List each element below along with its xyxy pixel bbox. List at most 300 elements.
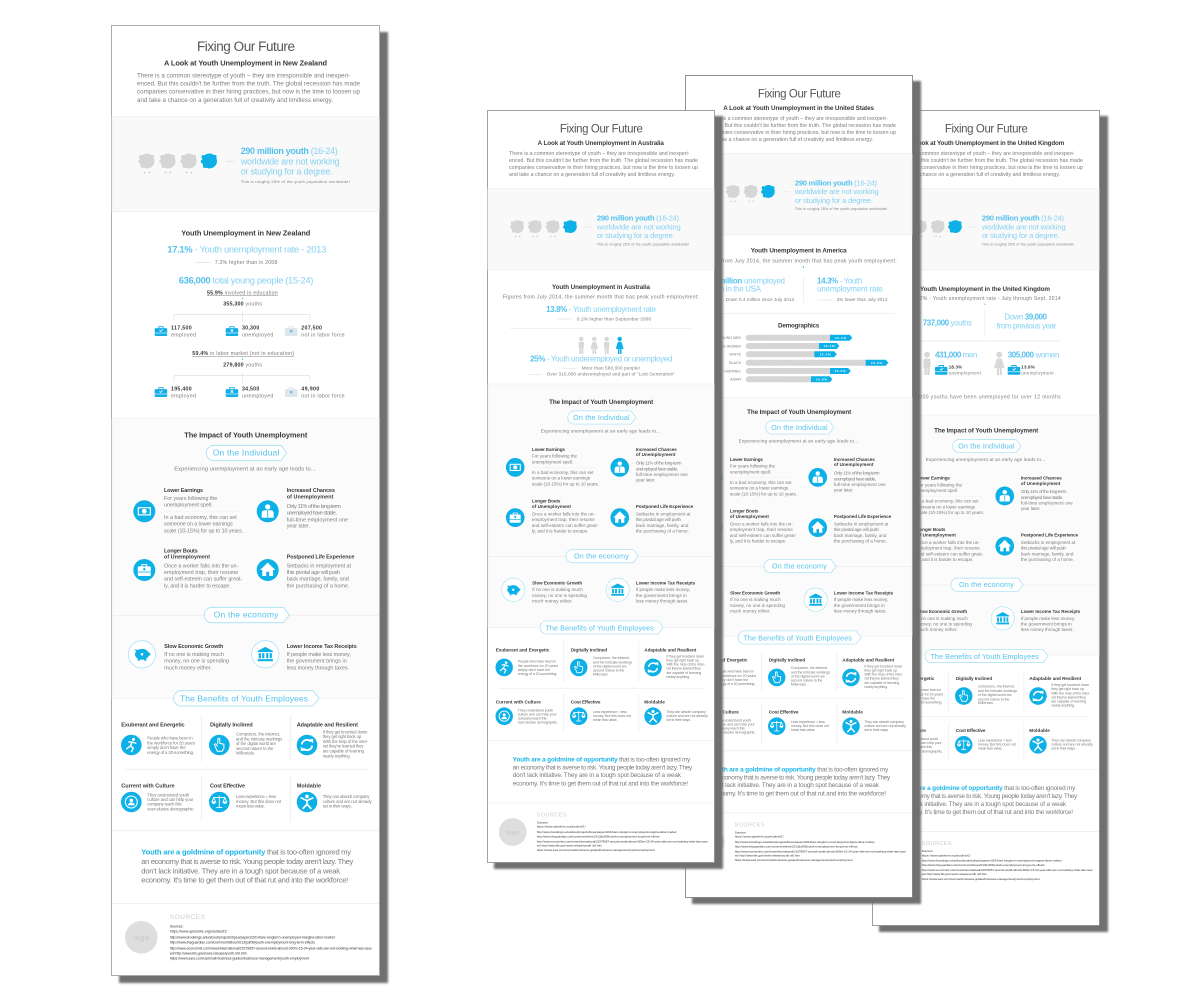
panel: global statistic [488,189,714,270]
benefit: moldable [842,710,906,735]
labor market breakdown: 279,800 youths [223,362,262,368]
panel: Australia statistics: 6.2% higher than September 2008 [577,316,651,321]
item: lower tax receipts [804,588,894,614]
benefit: current with culture: company reach this [903,745,932,749]
benefit: adaptable [644,647,706,679]
item: longer bouts: and self-esteem can suffer great- [164,577,243,583]
item: longer bouts: Once a worker falls into the un- [532,511,595,516]
item: slow growth: money, no one is spending [164,659,229,665]
item: longer bouts [133,548,243,589]
benefit: moldable: They can absorb company [864,720,904,724]
benefit: adaptable: net they've learned they [323,744,364,749]
benefit: cost effective: money. But this does not [236,799,282,804]
benefit: adaptable: If they get knocked down [1051,683,1089,687]
women statistic: unemployment [1021,370,1054,375]
benefit: moldable: They can absorb company [323,794,370,799]
benefit: exuberant: energy of a 20-something. [903,701,942,705]
item: postponed life experience: Postponed Life Experience [636,504,694,509]
benefit: digitally inclined: Computers, the internet, [236,731,280,736]
item: postponed life experience: Setbacks in employment at [636,511,691,516]
sources: Sources: [735,830,746,834]
tag: on the economy: On the economy [214,610,279,620]
item: postponed life experience: back marriage, family, and [287,577,349,583]
tag: on the economy: On the economy [574,551,629,560]
tag: on the economy [951,578,1023,591]
sources: SOURCES [922,841,952,847]
benefit: moldable: culture and are not already [323,799,373,804]
item: longer bouts: and self-esteem can suffer great- [532,523,599,528]
item: increased chances: of Unemployment [636,452,676,457]
benefit: digitally inclined: and the intricate workings [978,689,1017,693]
sources: ed/ http://www.bls.gov/news.release/youth.nr0.htm [735,854,800,858]
item: increased chances: unemployed have stable, [636,466,678,471]
benefit: moldable: set in their ways. [864,728,889,732]
closing statement: don't lack initiative. They are in a tough spot because of a weak [711,782,880,789]
bar: black: 24.8% [871,361,882,365]
tag: benefits [925,650,1048,663]
benefit: moldable: Moldable [644,700,665,705]
item: increased chances: Increased Chances [636,447,677,452]
youths statistic: 737,000 youths [923,319,972,328]
item: postponed life experience: Postponed Life Experience [834,514,892,519]
heading: Youth Unemployment in New Zealand [181,229,311,238]
item: lower earnings: Lower Earnings [730,457,763,462]
tag: on the individual: On the Individual [213,448,280,458]
logo placeholder: logo [704,840,718,846]
item: lower earnings: Lower Earnings [917,475,950,480]
closing statement: don't lack initiative. They are in a tough spot because of a weak [898,801,1067,808]
item: longer bouts [506,498,599,533]
title: Fixing Our Future [560,123,643,135]
unemployed count [706,276,794,302]
tag: benefits [174,691,319,706]
benefit: moldable: culture and are not already [666,714,708,718]
benefit: moldable [297,783,373,812]
bar: white: WHITE [729,353,742,357]
item: lower earnings: someone on a lower earnings [730,486,789,491]
header and hero: New Zealand [112,39,379,212]
tag: benefits: The Benefits of Youth Employees [743,633,852,642]
item: lower earnings: In a bad economy, this can set [917,499,979,504]
benefit: current with culture: They understand youth [147,792,190,797]
sources: https://www.sars.com/us/small-business-guides/business-management/youth-employment [922,877,1040,881]
women statistic: 13.9% [1021,365,1035,370]
sources [922,841,1093,881]
benefit: digitally inclined: second nature to the [978,697,1009,701]
benefit: digitally inclined [570,647,632,676]
item: lower earnings: scale (10-15%) for up to 10 years. [532,481,599,486]
benefit: digitally inclined [955,676,1017,705]
item: slow growth: If no one is making much [164,652,224,658]
sources: SOURCES [170,914,206,921]
panel: New Zealand sheet [112,26,388,983]
sources: http://www.economist.com/news/international/21579657-around-world-almost-300m-15-24-year-olds-are-not-working-what-has-caus [537,839,708,843]
item: lower tax receipts: Lower Income Tax Receipts [287,644,357,650]
benefit: current with culture: culture and can help your [716,722,756,726]
heading: Youth Unemployment in the United Kingdom [920,286,1050,293]
tag: on the individual: On the Individual [771,423,828,432]
panel: impact background [488,384,714,628]
benefit: adaptable: are capable of learning [1051,700,1086,704]
panel: Australia statistics: Over 310,000 underemployed and part of "Lost Generation" [547,372,675,377]
benefit: current with culture: ever-elusive demographic. [903,749,943,753]
benefit: cost effective: mean less value. [791,728,815,732]
item: lower earnings: unemployment spell. [730,469,771,474]
sources [537,812,708,852]
item: lower tax receipts: the government brings in [1021,622,1072,627]
statistic text: worldwide are not working [981,222,1066,231]
tag: on the economy: On the economy [772,561,827,570]
bar chart: demographics [713,335,888,382]
benefit: cost effective: Less experience = less [593,710,627,714]
item: longer bouts: Once a worker falls into the un- [164,563,239,569]
icon row: heads [138,154,217,174]
benefit: current with culture: ever-elusive demographic. [716,731,756,735]
panel: impact background [112,418,379,699]
benefit: adaptable: If they get knocked down [666,654,704,658]
bar: white [729,351,837,357]
benefit: digitally inclined: of the digital world are [978,693,1012,697]
item: lower tax receipts: the government brings in [636,593,687,598]
tag: on the individual [568,411,636,424]
sources: http://www.theguardian.com/commentisfree/2013/jul/09/youth-unemployment-long-term-effects [537,834,660,839]
total young people: 636,000 total young people (15-24) [179,274,313,285]
benefit: exuberant: energy of a 20-something. [518,672,557,676]
benefit: adaptable: are capable of learning [864,681,899,685]
item: lower tax receipts: less money through taxes. [834,609,887,614]
sources: Sources: [537,820,548,824]
closing statement: an economy that is averse to risk. Young people today aren't lazy. They [711,774,891,781]
unemployment rate [817,276,888,302]
benefit: exuberant: People who have been in [518,660,556,664]
unemployed count: 5.5 million unemployed [706,276,785,285]
item: longer bouts: of Unemployment [730,514,769,519]
benefit: current with culture: They understand youth [518,708,553,712]
benefit: adaptable: nearly anything. [323,753,351,758]
benefit: current with culture [880,728,943,754]
statistic text: worldwide are not working [596,222,681,231]
benefit: adaptable: net they've learned they [864,677,899,681]
item: postponed life experience [995,533,1079,562]
item: slow growth: much money either. [164,665,212,671]
sources: SOURCES [537,812,567,818]
item: postponed life experience [257,555,354,589]
benefit: exuberant: energy of a 20-something. [147,750,194,755]
item: slow growth: Slow Economic Growth [917,609,967,614]
item: postponed life experience: Setbacks in employment at [287,563,352,569]
benefit: digitally inclined: Millenials. [593,672,609,676]
closing statement: Youth are a goldmine of opportunity [898,785,1003,792]
lower content: New Zealand [112,430,379,961]
benefit: exuberant [880,676,943,705]
item: increased chances: Only 11% of the long-term [834,471,880,476]
item: increased chances: unemployed have stable, [834,476,876,481]
item: postponed life experience: this pivotal age will push [287,570,340,576]
benefit: cost effective: mean less value. [593,718,617,722]
item: longer bouts: and self-esteem can suffer great- [917,551,984,556]
intro paragraph: companies conservative in their hiring practices, but now is the time to loosen up [137,89,361,96]
closing statement: economy. It's time to get them out of that rut and into the workforce! [513,780,688,787]
unemployment rate: 13.8% - Youth unemployment rate [546,305,657,314]
item: longer bouts [891,527,984,562]
intro paragraph: There is a common stereotype of youth – they are irresponsible and inexperi- [137,72,350,80]
sources: http://www.brookings.edu/about/projects/bpea/papers/2014/are-longterm-unemployed-margins-labor-market [735,840,875,844]
benefit: current with culture: Current with Culture [881,728,926,733]
labor market breakdown: not in labor force [301,393,345,399]
benefit: current with culture: They understand youth [716,718,751,722]
labor market breakdown: unemployed [242,393,273,399]
item: slow growth [502,578,587,604]
benefit: cost effective: mean less value. [236,804,265,809]
benefit: adaptable: nearly anything. [864,685,888,689]
benefit: current with culture: company reach this [716,726,745,730]
benefit: current with culture [693,710,756,735]
sources: https://www.aploshire.org/studies/f1/ [170,929,227,933]
statistic text: This is roughly 25% of the youth population worldwide! [241,179,350,184]
item: increased chances: full-time employment one [636,472,688,477]
bar: black: BLACK [729,361,742,365]
item: lower earnings: For years following the [164,496,217,502]
item: postponed life experience: this pivotal age will push [636,517,681,522]
panel: Australia statistics: More than 580,000 people! [582,366,640,371]
item: lower earnings: scale (10-15%) for up to 10 years. [730,491,797,496]
sources: https://www.aploshire.org/studies/f1/ [922,853,971,857]
closing statement: economy. It's time to get them out of that rut and into the workforce! [898,809,1073,816]
closing statement: that is too-often ignored my [1004,785,1076,792]
sheet paper [872,110,1100,926]
item: postponed life experience: this pivotal age will push [1021,546,1066,551]
item: lower earnings [506,447,599,486]
item: longer bouts: of Unemployment [917,533,956,538]
benefits grid [121,722,373,812]
sources: ed/ http://www.bls.gov/news.release/youth.nr0.htm [922,872,987,876]
item: slow growth: money, no one is spending [532,593,587,598]
heading: Youth Unemployment in Australia [552,284,650,291]
labor market breakdown: 49,900 [301,386,319,392]
item: slow growth: If no one is making much [532,587,583,592]
benefit: moldable: Moldable [1029,728,1050,733]
benefit: digitally inclined: of the digital world are [791,674,825,678]
sources: http://www.theguardian.com/commentisfree/2013/jul/09/youth-unemployment-long-term-effects [922,863,1045,867]
lower content: United States [686,409,912,862]
benefit: digitally inclined: Computers, the internet, [978,685,1015,689]
sources: SOURCES [735,822,765,828]
item: lower earnings: For years following the [730,464,776,469]
benefit: digitally inclined [768,657,830,686]
statistic text [981,214,1074,246]
benefit: adaptable: net they've learned they [1051,695,1086,699]
sheet shadow [879,116,1108,932]
closing statement: that is too-often ignored my [619,756,691,763]
panel: United Kingdom sheet [872,110,1108,932]
item: lower earnings: unemployment spell. [532,459,573,464]
item: lower earnings: Lower Earnings [532,447,565,452]
benefit: cost effective: Cost Effective [571,700,601,705]
item: slow growth: money, no one is spending [730,603,785,608]
panel: global statistic [873,189,1099,270]
rate line: 16.2% - Youth unemployment rate - July through Sept. 2014 [912,296,1061,302]
benefit: moldable: culture and are not already [864,724,906,728]
item: slow growth: much money either. [730,609,771,614]
sources: http://www.economist.com/news/international/21579657-around-world-almost-300m-15-24-year-olds-are-not-working-what-has-caus [922,868,1093,872]
statistic text: 290 million youth (16-24) [241,146,338,156]
sources: http://www.brookings.edu/about/projects/bpea/papers/2014/are-longterm-unemployed-margins-labor-market [922,858,1062,862]
benefit: adaptable: net they've learned they [666,667,701,671]
benefit: current with culture [495,700,558,725]
lower content: Australia [488,399,714,852]
benefit: current with culture: ever-elusive demographic. [147,807,195,812]
labor market breakdown: 195,400 [171,386,192,392]
benefits grid [693,657,906,735]
benefit: adaptable: they get right back up. [323,734,362,739]
education breakdown: 55.9% involved in education [207,290,278,296]
benefit: adaptable [297,722,369,758]
item: increased chances [808,457,886,492]
sources: http://www.brookings.edu/about/projects/bpea/papers/2014/are-longterm-unemployed-margins-labor-market [170,935,335,939]
benefit: cost effective: Cost Effective [769,710,799,715]
title: Fixing Our Future [758,88,841,100]
sheet paper [686,76,912,898]
title: Fixing Our Future [197,39,295,54]
statistic text [794,178,887,211]
item: lower tax receipts [252,641,357,671]
labor market breakdown: 34,500 [242,386,259,392]
bar: young women: YOUNG WOMEN [713,344,741,348]
benefit: cost effective: Less experience = less [791,720,825,724]
benefit: cost effective: Less experience = less [236,794,276,799]
men statistic: 431,000 men [935,350,977,359]
bar: young women [713,343,839,349]
item: slow growth: Slow Economic Growth [532,580,582,585]
benefit: adaptable: Adaptable and Resilient [644,647,697,652]
tag: benefits [738,631,861,644]
benefit: adaptable: they get right back up. [666,658,700,662]
statistic text: worldwide are not working [794,187,879,196]
benefit: moldable: They can absorb company [666,710,706,714]
item: slow growth [700,588,785,614]
unemployment rate: unemployment rate [817,285,883,294]
men statistic: unemployment [949,370,982,375]
statistic text: 290 million youth (16-24) [982,214,1064,223]
intro paragraph: and take a chance on a generation full of creativity and limitless energy. [509,172,675,178]
intro paragraph: There is a common stereotype of youth – they are irresponsible and inexperi- [509,151,690,157]
sources: ed/ http://www.bls.gov/news.release/youth.nr0.htm [170,951,247,955]
benefit: digitally inclined: second nature to the [593,669,624,673]
benefit: current with culture: ever-elusive demographic. [518,721,558,725]
item: lower earnings: In a bad economy, this can set [164,515,237,521]
benefit: exuberant [121,722,195,755]
item: increased chances: Only 11% of the long-term [636,461,682,466]
benefit: cost effective: money. But this does not [791,724,829,728]
sources: http://www.economist.com/news/international/21579657-around-world-almost-300m-15-24-year-olds-are-not-working-what-has-caus [170,946,372,950]
tag: on the individual: On the Individual [573,413,630,422]
benefit: cost effective: money. But this does not [978,743,1016,747]
item: longer bouts: ly, and it is harder to escape. [164,583,231,589]
unemployed count: youth in the USA [706,285,762,294]
panel: global statistic [686,153,912,235]
logo placeholder [884,847,911,875]
benefit: exuberant: the workforce for 20 years [716,674,756,678]
item: increased chances: Increased Chances [834,457,875,462]
statistic text: or studying for a degree. [982,231,1060,240]
item: increased chances [995,475,1073,511]
education breakdown: 117,500 [171,326,192,332]
sources: http://www.theguardian.com/commentisfree/2013/jul/09/youth-unemployment-long-term-effects [170,941,315,945]
statistic text: 290 million youth (16-24) [597,214,679,223]
panel: United States statistics [700,248,897,382]
intro line: Experiencing unemployment at an early age leads to... [541,429,660,435]
intro paragraph: enced. But this couldn't be further from the truth. The global recession has made [707,123,896,129]
unemployment rate: 17.1% - Youth unemployment rate - 2013 [167,244,326,255]
unemployed count: Down 0.4 million since July 2013 [726,297,794,302]
item: lower tax receipts: Lower Income Tax Receipts [636,580,696,585]
subtitle: A Look at Youth Unemployment in the United Kingdom [908,140,1065,147]
benefit: digitally inclined: and the intricate workings [236,736,282,741]
sources [735,822,906,862]
panel: impact background [686,397,912,636]
item: lower earnings: Lower Earnings [164,488,203,494]
women statistic: 305,000 women [1008,350,1059,359]
bar: young women: 13.4% [824,344,835,348]
intro paragraph [707,116,896,143]
item: increased chances: full-time employment one [1021,501,1073,506]
benefit: moldable: culture and are not already [1051,743,1093,747]
closing statement: Youth are a goldmine of opportunity [513,756,618,763]
benefit: digitally inclined: Digitally Inclined [571,647,607,652]
benefits grid [495,647,708,725]
item: increased chances [257,488,348,530]
closing statement: Youth are a goldmine of opportunity [141,848,266,857]
education breakdown: unemployed [242,333,273,339]
tag: benefits: The Benefits of Youth Employees [180,694,308,704]
statistic text: This is roughly 25% of the youth population worldwide! [982,242,1074,246]
intro paragraph [894,151,1083,178]
logo placeholder [125,921,158,954]
benefit: adaptable [842,657,904,689]
sheet paper [488,110,714,862]
labor market breakdown: 59.4% in labor market (not in education) [192,351,294,357]
item: slow growth: If no one is making much [730,597,781,602]
item: increased chances: unemployed have stable, [1021,495,1063,500]
intro paragraph: and take a chance on a generation full of creativity and limitless energy. [137,97,333,104]
benefit: digitally inclined: and the intricate workings [593,660,632,664]
icon row: heads [895,220,962,238]
bar: white: 12.2% [820,352,831,356]
intro paragraph [137,72,361,104]
benefit: current with culture: culture and can help your [518,712,558,716]
tag: benefits: The Benefits of Youth Employees [930,652,1039,661]
statistic text: or studying for a degree. [241,166,333,176]
item: longer bouts: Longer Bouts [164,548,198,554]
benefit: adaptable: are capable of learning [323,749,365,754]
benefit: digitally inclined [209,722,282,755]
item: lower earnings: unemployment spell. [917,488,958,493]
benefit: digitally inclined: Millenials. [978,701,994,705]
sources: http://www.economist.com/news/international/21579657-around-world-almost-300m-15-24-year-olds-are-not-working-what-has-caus [735,849,906,853]
benefit: digitally inclined: Computers, the internet, [593,656,630,660]
benefit: current with culture: Current with Culture [496,700,541,705]
item: lower tax receipts: If people make less money, [636,587,690,592]
benefit: moldable: set in their ways. [1051,747,1076,751]
impact heading: The Impact of Youth Unemployment [549,399,654,406]
panel: United Kingdom statistics [908,286,1061,401]
benefit: digitally inclined: second nature to the [236,746,274,751]
bar: asian [730,376,832,382]
benefit: adaptable: they get right back up. [1051,687,1085,691]
icon row: heads [510,220,577,238]
intro paragraph: enced. But this couldn't be further from the truth. The global recession has made [509,158,698,164]
panel: impact background [873,415,1099,655]
